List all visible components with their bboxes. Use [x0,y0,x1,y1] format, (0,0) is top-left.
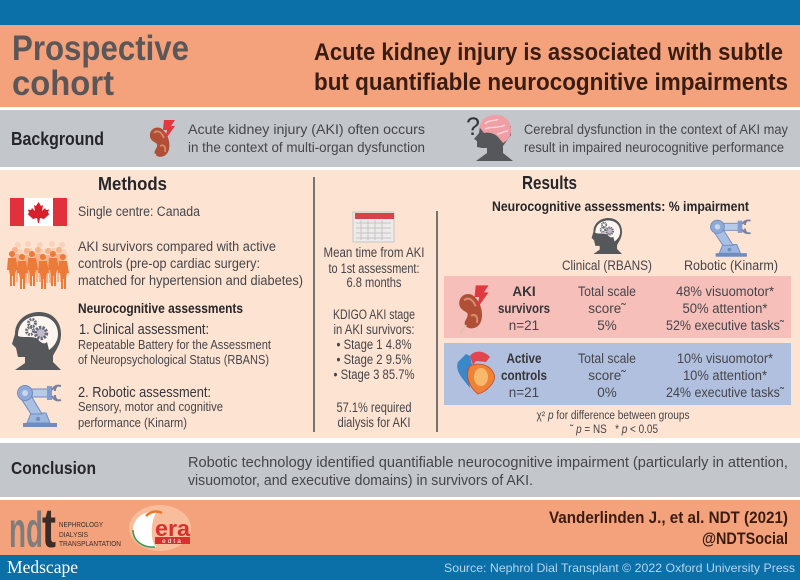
text: KDIGO stages: • Stage 3 85.7% [334,367,414,382]
top blue band [0,0,800,25]
AKI group label: AKI [512,284,536,299]
Medscape wordmark: Medscape [7,557,78,577]
logo: ndt [9,496,121,559]
control group label: n=21 [509,385,539,400]
text: clinical assessment: 1. Clinical assessment: [79,322,209,338]
main peach panel [0,170,800,438]
icon: kidney [459,285,489,333]
footer band [0,496,800,559]
icon: injured kidney [150,120,175,161]
control robotic result: 10% visuomotor* [677,351,774,366]
subheading: neurocognitive assessments: Neurocognitive assessments [78,301,243,316]
text: clinical assessment: of Neuropsychological Status (RBANS) [78,353,269,367]
conclusion text: Robotic technology identified quantifiable neurocognitive impairment (particularly in attention, [188,455,788,471]
background text: AKI [188,121,425,155]
conclusion text [188,455,788,489]
logo: ndt: TRANSPLANTATION [59,541,121,548]
logo: ndt: t [42,496,56,559]
background heading: Background [11,128,104,149]
conclusion heading: Conclusion [11,458,96,478]
text: robotic assessment: 2. Robotic assessment: [78,385,211,401]
column label: clinical: Clinical (RBANS) [562,258,652,273]
icon: head with gears [12,312,61,370]
icon: crowd of people [7,241,69,289]
panel: background [0,110,800,167]
methods heading: Methods [98,174,167,194]
control clinical result: 0% [597,385,617,400]
control clinical result: Total scale [578,351,636,366]
header panel [0,25,800,107]
source line: Source: Nephrol Dial Transplant © 2022 Oxford University Press [444,561,795,575]
statistics footnote [536,410,690,436]
text: comparison groups [78,239,303,288]
icon: Canadian flag [10,198,67,226]
control robotic result [666,351,784,400]
logo: ndt: NEPHROLOGY [59,522,103,529]
control robotic result: 24% executive tasks˜ [666,385,784,400]
icon: heart [457,352,495,394]
text: comparison groups: AKI survivors compared with active [78,239,276,254]
control clinical result [578,351,636,400]
text: dialysis: 57.1% required [336,400,412,415]
control group label: Active [506,351,542,366]
AKI clinical result [578,284,636,333]
icon: calendar [353,212,394,242]
text: clinical assessment: Repeatable Battery for the Assessment [78,338,271,352]
statistics footnote: ˜ p = NS * p < 0.05 [569,424,658,436]
background text: cerebral [524,121,788,155]
AKI robotic result [666,284,784,333]
control group label: controls [501,368,547,383]
text: dialysis: dialysis for AKI [338,415,410,430]
control clinical result: score˜ [588,368,626,383]
logo: ERA: era [155,516,191,541]
background text: AKI: Acute kidney injury (AKI) often occurs [188,121,425,137]
study type heading [12,29,189,103]
results heading: Results [522,173,577,193]
text: KDIGO stages: • Stage 1 4.8% [336,337,412,352]
text: KDIGO stages [333,307,415,382]
icon: robot [711,220,751,257]
control group label [501,351,547,400]
panel: conclusion [0,443,800,497]
text: dialysis [336,400,412,430]
AKI clinical result: Total scale [578,284,636,299]
title [314,39,788,96]
text: single centre: Single centre: Canada [78,204,200,219]
row: AKI survivors [444,276,791,338]
icon: robotic arm [18,386,61,427]
text: KDIGO stages: • Stage 2 9.5% [336,352,412,367]
text: robotic assessment: performance (Kinarm) [78,416,187,430]
AKI group label: survivors [498,301,550,316]
AKI clinical result: score˜ [588,301,626,316]
panel: methods [7,174,303,430]
citation [549,508,788,548]
study type heading: cohort [12,64,114,103]
row: active controls [444,343,791,405]
logo: ERA: edta [162,538,183,545]
AKI robotic result: 50% attention* [682,301,768,316]
text: clinical assessment [78,322,271,367]
AKI robotic result: 52% executive tasks˜ [666,318,784,333]
text: comparison groups: matched for hypertension and diabetes) [78,273,303,288]
background text: AKI: in the context of multi-organ dysfunction [188,139,425,155]
text: mean time: to 1st assessment: [328,261,420,276]
icon: head with brain and question mark: ? [466,113,480,141]
AKI group label [498,284,550,333]
bottom blue band [0,555,800,580]
AKI robotic result: 48% visuomotor* [676,284,775,299]
study type heading: Prospective [12,29,189,68]
icon: clinical head [592,218,622,254]
icon: head with brain and question mark [466,113,513,161]
logo: ERA [129,505,191,551]
AKI group label: n=21 [509,318,539,333]
text: KDIGO stages: in AKI survivors: [334,322,414,337]
panel: results [444,173,791,436]
AKI clinical result: 5% [597,318,617,333]
text: KDIGO stages: KDIGO AKI stage [333,307,415,322]
text: mean time [324,245,424,290]
logo: ndt: nd [9,502,43,558]
results subheading: Neurocognitive assessments: % impairment [492,198,749,214]
text: mean time: Mean time from AKI [324,245,424,260]
text: mean time: 6.8 months [346,275,402,290]
conclusion text: visuomotor, and executive domains) in survivors of AKI. [188,473,533,489]
statistics footnote: χ² p for difference between groups [536,410,690,422]
text: robotic assessment: Sensory, motor and cognitive [78,400,223,414]
text: comparison groups: controls (pre-op cardiac surgery: [78,256,260,271]
text: robotic assessment [78,385,223,430]
logo: ndt: DIALYSIS [59,532,88,539]
column label: robotic: Robotic (Kinarm) [684,258,778,273]
control robotic result: 10% attention* [683,368,768,383]
background text: cerebral: result in impaired neurocognitive performance [524,139,784,155]
panel: timing and KDIGO stage [324,212,424,430]
